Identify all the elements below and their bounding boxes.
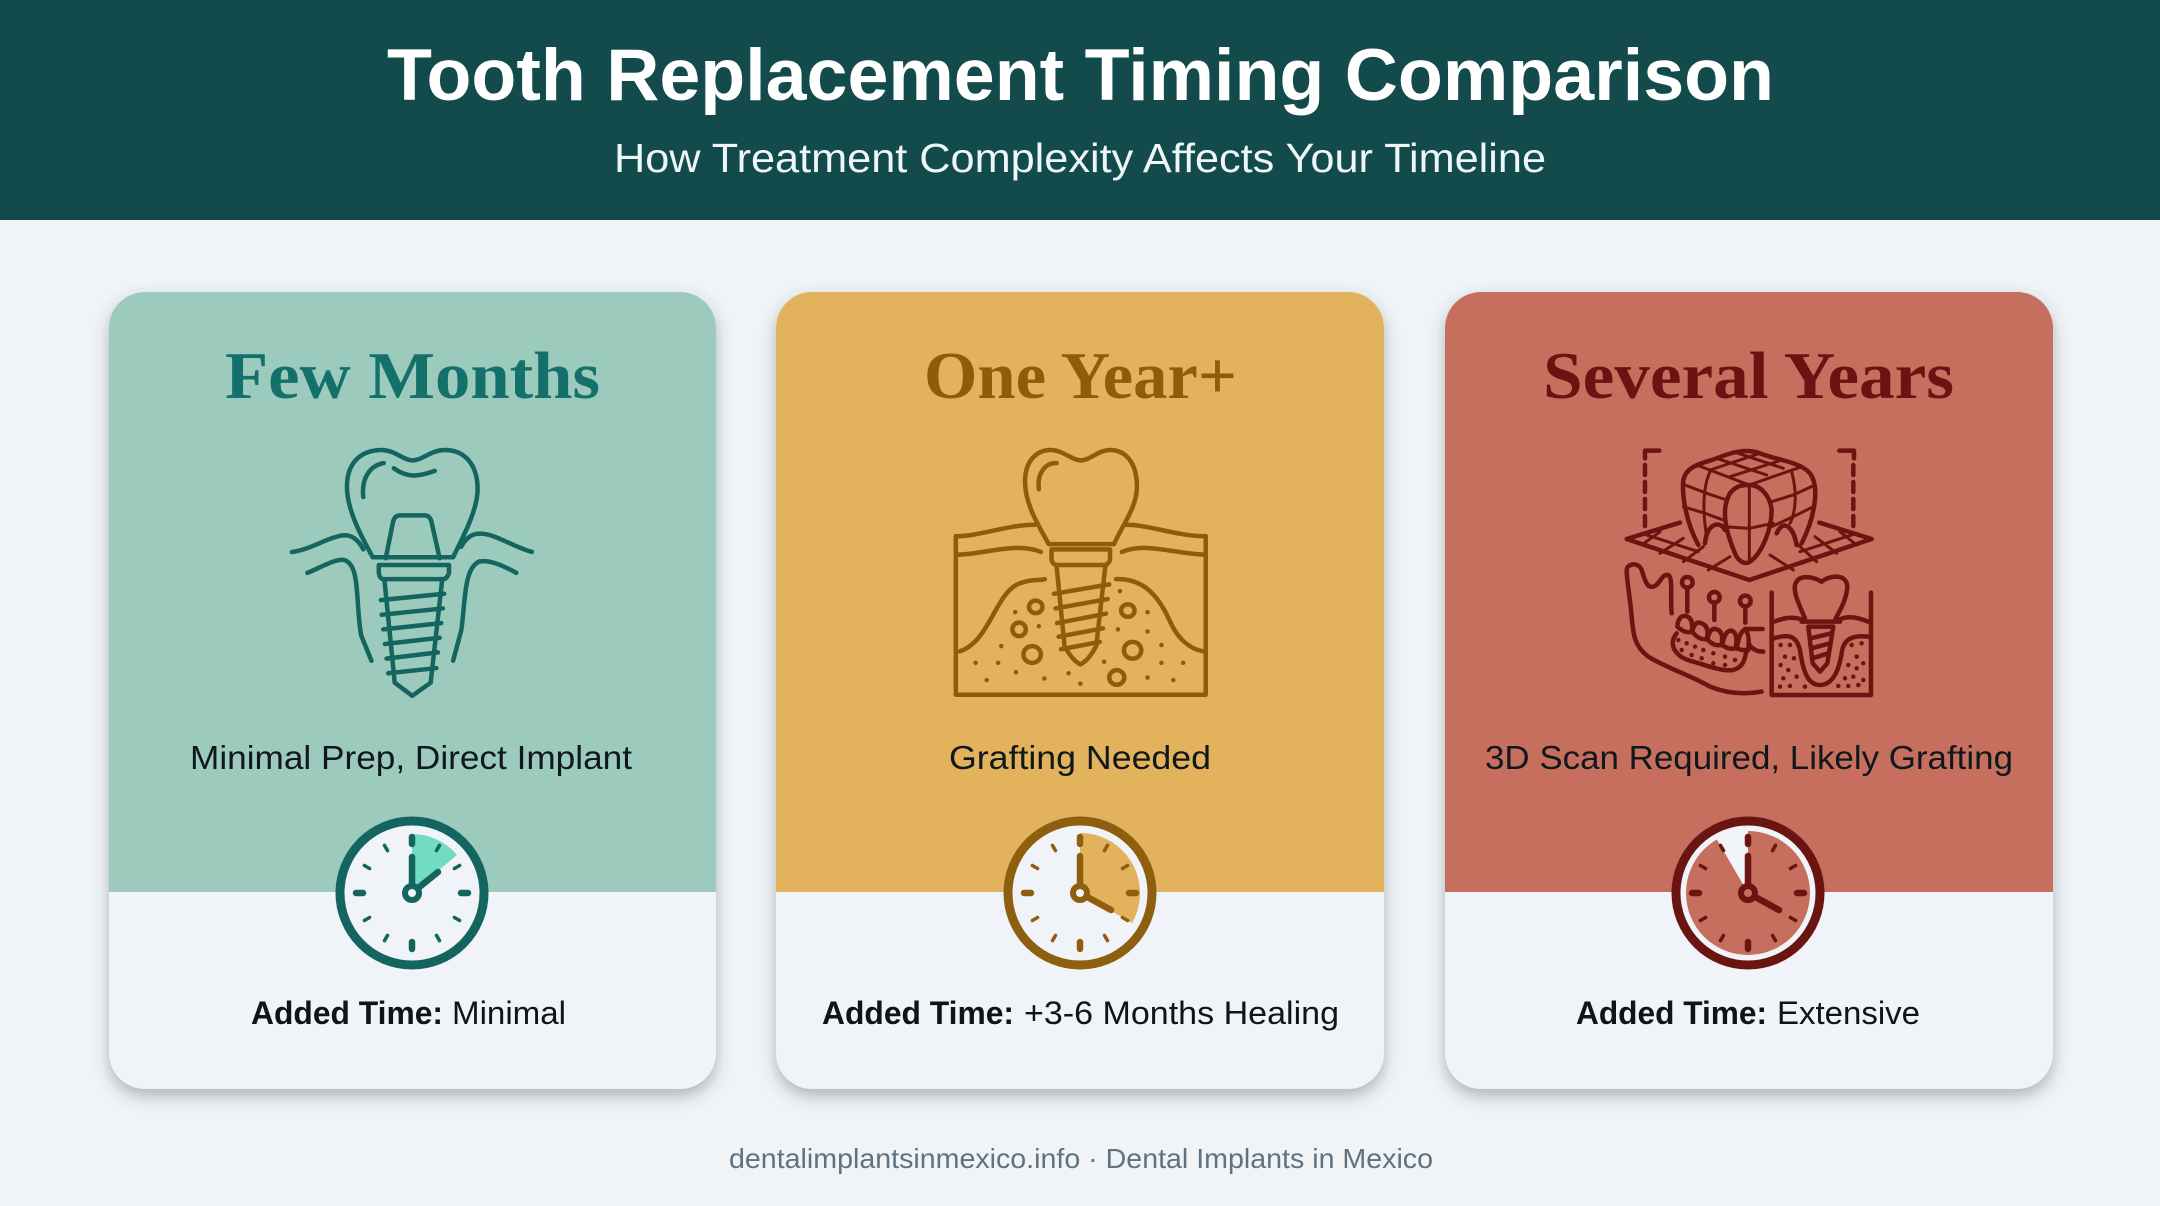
text: added time minimal [251, 995, 566, 1031]
heading: one year plus: One Year+ [924, 339, 1237, 413]
text: added time minimal: Minimal [452, 995, 566, 1031]
text: added time healing: Added Time: [822, 995, 1014, 1031]
text: added time extensive: Extensive [1777, 995, 1920, 1031]
text: several years requirement: 3D Scan Required, Likely Grafting [1485, 739, 2013, 776]
icon: 3D scan, jaw and implant [1627, 451, 1872, 695]
text: added time extensive: Added Time: [1576, 995, 1767, 1031]
icon: direct implant [292, 450, 532, 696]
icon: implant with bone graft [956, 450, 1206, 695]
text: one year requirement: Grafting Needed [949, 739, 1211, 776]
text: added time minimal: Added Time: [251, 995, 443, 1031]
text: added time healing: +3-6 Months Healing [1024, 995, 1339, 1031]
footer source line: dentalimplantsinmexico.info · Dental Implants in Mexico [729, 1143, 1433, 1174]
icon: clock plus 3-6 months [1008, 821, 1152, 965]
heading: several years: Several Years [1543, 339, 1954, 413]
panel: few months [109, 292, 716, 1089]
text: added time healing [822, 995, 1339, 1031]
header band [0, 0, 2160, 220]
text: added time extensive [1576, 995, 1920, 1031]
title: Tooth Replacement Timing Comparison [387, 35, 1774, 116]
icon: clock extensive [1676, 821, 1820, 965]
heading: few months: Few Months [225, 339, 600, 413]
panel: several years [1445, 292, 2053, 1089]
text: few months requirement: Minimal Prep, Direct Implant [190, 739, 632, 776]
panel: one year plus [776, 292, 1384, 1089]
subtitle: How Treatment Complexity Affects Your Timeline [614, 135, 1546, 181]
icon: clock minimal [340, 821, 484, 965]
